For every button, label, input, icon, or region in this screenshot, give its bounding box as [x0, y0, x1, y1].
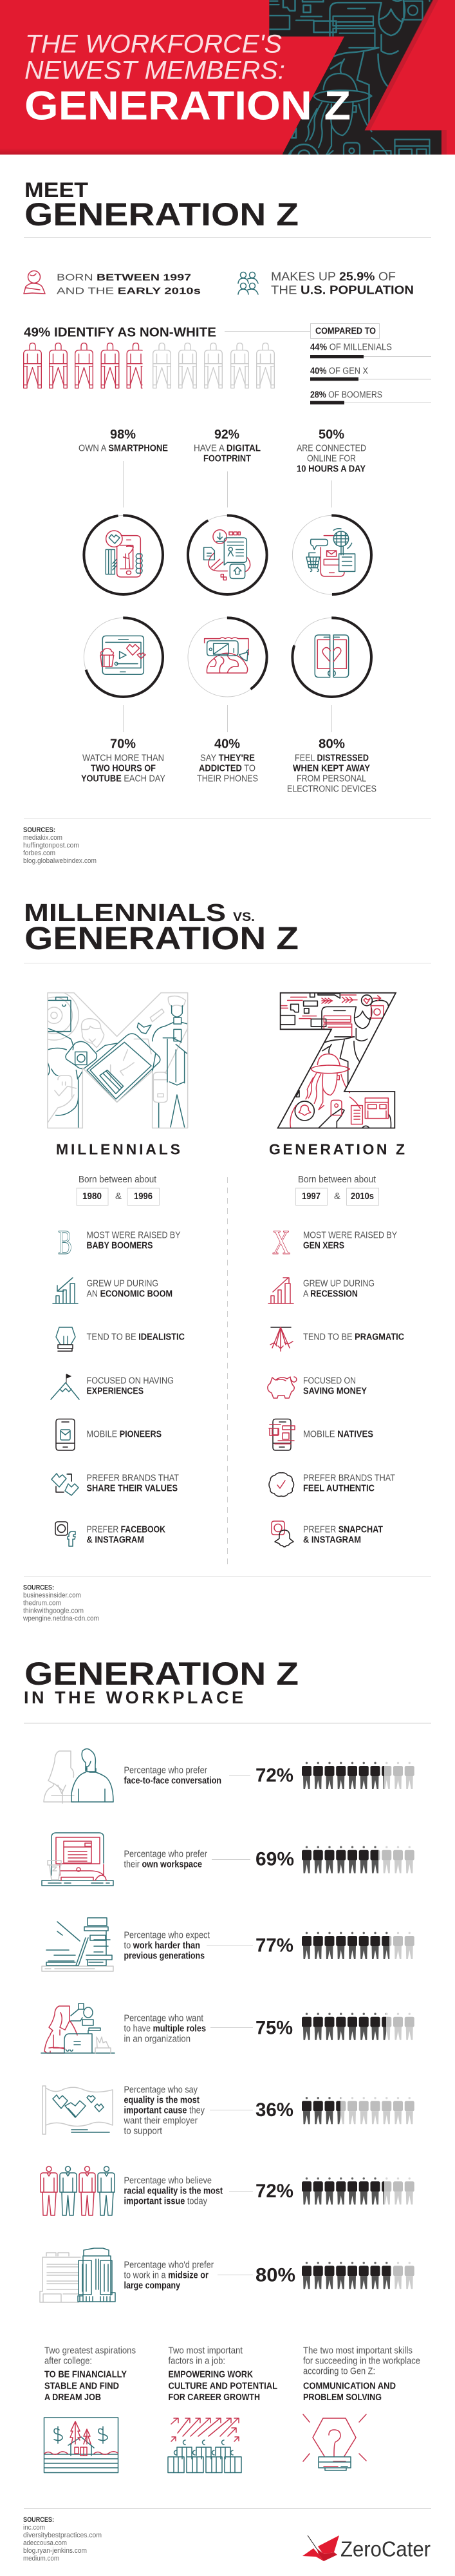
birth years: millennials: [77, 1174, 160, 1206]
banner title: THE WORKFORCE'S: [25, 30, 282, 58]
comparison bars: COMPARED TO: [315, 326, 376, 337]
header banner: [0, 0, 455, 155]
workplace row: own workspace: [42, 1833, 414, 1886]
workplace row: face-to-face: 72%: [255, 1765, 293, 1786]
heading: meet generation z: [24, 178, 299, 232]
sources 3: diversitybestpractices.com: [23, 2532, 102, 2539]
row: social, gen z: PREFER SNAPCHAT: [303, 1524, 383, 1535]
stat: addicted: [188, 618, 267, 784]
banner title: [24, 30, 351, 129]
icon: connected shopping: [306, 529, 355, 576]
column: aspirations: [44, 2345, 136, 2473]
workplace row: face-to-face: [44, 1749, 414, 1803]
sources 1: huffingtonpost.com: [23, 842, 79, 849]
icon: digital footprint: [204, 530, 250, 580]
stat: youtube: TWO HOURS OF: [91, 763, 156, 773]
stat: connected online: 10 HOURS A DAY: [297, 464, 366, 474]
stat: distressed: 80%: [319, 737, 345, 752]
row: social, millennials: [55, 1522, 165, 1546]
row: brands, millennials: SHARE THEIR VALUES: [86, 1484, 178, 1494]
sources 1: mediakix.com: [23, 834, 62, 842]
stat: addicted: 40%: [214, 737, 240, 752]
sources 2: wpengine.netdna-cdn.com: [23, 1615, 99, 1623]
birth years: gen z: &: [334, 1191, 340, 1202]
row: social, gen z: & INSTAGRAM: [303, 1535, 361, 1545]
born between block: AND THE EARLY 2010s: [57, 287, 201, 297]
column: skills: according to Gen Z:: [303, 2365, 375, 2376]
workplace row: work harder: previous generations: [124, 1950, 205, 1961]
column: job factors: factors in a job:: [169, 2355, 225, 2366]
icon: team with arrows: [168, 2418, 241, 2473]
column: job factors: CULTURE AND POTENTIAL: [169, 2381, 277, 2391]
birth years: millennials: 1980: [82, 1191, 102, 1202]
icon: instagram and snapchat: [272, 1521, 284, 1535]
sources 3: medium.com: [23, 2555, 59, 2562]
row: mobile, gen z: MOBILE NATIVES: [303, 1429, 373, 1439]
sources 2: thedrum.com: [23, 1600, 61, 1607]
birth years: millennials: Born between about: [79, 1174, 157, 1185]
icon: letter B: B: [58, 1223, 72, 1262]
row: mobile, millennials: [56, 1419, 162, 1450]
stat: addicted: SAY THEY'RE: [200, 753, 255, 763]
icon: authenticity badge: [269, 1473, 293, 1497]
stat: digital footprint: [188, 428, 267, 594]
workplace row: racial equality: [41, 2166, 414, 2215]
stat: youtube: WATCH MORE THAN: [82, 753, 164, 763]
column: skills: [303, 2345, 420, 2470]
row: mobile, millennials: MOBILE PIONEERS: [86, 1429, 162, 1439]
row: social, millennials: PREFER FACEBOOK: [86, 1524, 165, 1535]
heading: millennials vs generation z: [24, 900, 299, 956]
workplace row: multiple roles: to have multiple roles: [124, 2023, 206, 2034]
stat: digital footprint: 92%: [214, 428, 239, 442]
icon: roots: [271, 1327, 291, 1328]
workplace row: equality cause: important cause they: [124, 2105, 205, 2116]
heading: meet generation z: GENERATION Z: [24, 196, 299, 232]
population block: [238, 270, 414, 297]
workplace row: multiple roles: 75%: [255, 2017, 293, 2038]
row: mindset, millennials: TEND TO BE IDEALISTIC: [86, 1332, 185, 1343]
column: job factors: EMPOWERING WORK: [169, 2370, 253, 2380]
heading: generation z in the workplace: GENERATION Z: [24, 1656, 299, 1692]
stat: distressed: FROM PERSONAL: [297, 773, 366, 784]
row: brands, gen z: [269, 1473, 395, 1497]
icon: phone with heart: [106, 531, 142, 577]
row: social, millennials: & INSTAGRAM: [86, 1535, 144, 1545]
row: focus, millennials: FOCUSED ON HAVING: [86, 1376, 174, 1387]
row: economy, millennials: GREW UP DURING: [86, 1279, 158, 1289]
sources 3: SOURCES:: [23, 2516, 54, 2524]
row: mindset, gen z: [270, 1327, 404, 1351]
stat: smartphone: [79, 428, 168, 594]
heading: generation z in the workplace: IN THE WORKPLACE: [24, 1688, 243, 1707]
birth years: gen z: 2010s: [351, 1191, 374, 1202]
banner title: GENERATION Z: [24, 84, 351, 129]
generation z label: GENERATION Z: [269, 1141, 405, 1158]
row: raised by, gen z: [272, 1223, 397, 1262]
banner dark Z with line art: [269, 0, 441, 155]
comparison bars: [310, 323, 431, 404]
column: skills: COMMUNICATION AND: [303, 2381, 396, 2391]
workplace row: equality cause: to support: [124, 2125, 163, 2136]
workplace row: equality cause: want their employer: [124, 2115, 198, 2126]
row: economy, millennials: AN ECONOMIC BOOM: [86, 1289, 172, 1300]
birth years: gen z: [296, 1174, 378, 1206]
banner title: NEWEST MEMBERS:: [24, 57, 285, 85]
icon: lightbulb: [56, 1327, 75, 1345]
workplace row: work harder: Percentage who expect: [124, 1929, 210, 1940]
column: skills: PROBLEM SOLVING: [303, 2392, 382, 2403]
comparison bars: 28% OF BOOMERS: [310, 389, 382, 400]
workplace row: multiple roles: in an organization: [124, 2033, 190, 2044]
stat: youtube: 70%: [110, 737, 136, 752]
sources 1: [23, 826, 97, 865]
icon: piggy bank: [268, 1377, 297, 1398]
millennials label: MILLENNIALS: [56, 1141, 180, 1158]
circle icons, drawn in 3x coordinates: [100, 529, 355, 677]
workplace row: company size: Percentage who'd prefer: [124, 2260, 214, 2271]
pictogram: ten figures: [24, 343, 274, 388]
column: skills: The two most important skills: [303, 2345, 413, 2356]
population block: MAKES UP 25.9% OF: [271, 270, 396, 283]
heading: meet generation z: MEET: [24, 178, 89, 202]
icon: dream house: [44, 2418, 118, 2473]
stat: smartphone: 98%: [110, 428, 136, 442]
row: brands, millennials: [51, 1473, 179, 1495]
icon: two people talking: [44, 1749, 113, 1803]
stat: addicted: ADDICTED TO: [199, 763, 255, 773]
workplace row: own workspace: 69%: [255, 1849, 294, 1870]
sources 1: SOURCES:: [23, 826, 55, 834]
column: aspirations: STABLE AND FIND: [44, 2381, 119, 2391]
population block: THE U.S. POPULATION: [271, 284, 414, 297]
workplace row: equality cause: 36%: [255, 2099, 293, 2121]
sources 2: businessinsider.com: [23, 1592, 81, 1600]
row: focus, millennials: [51, 1374, 174, 1399]
row: economy, gen z: GREW UP DURING: [303, 1279, 375, 1289]
heading: millennials vs generation z: VS.: [233, 911, 255, 924]
icon: flag with hearts: [42, 2086, 113, 2134]
row: focus, gen z: SAVING MONEY: [303, 1387, 367, 1397]
row: raised by, gen z: MOST WERE RAISED BY: [303, 1230, 397, 1240]
row: raised by, millennials: BABY BOOMERS: [86, 1240, 153, 1251]
workplace row: company size: large company: [124, 2280, 181, 2291]
icon: four people: [41, 2166, 115, 2215]
icon: mountain and flag: [51, 1383, 79, 1399]
illustration: letter M: [47, 992, 188, 1128]
icon: letter X: X: [272, 1223, 290, 1262]
sources 3: blog.ryan-jenkins.com: [23, 2547, 87, 2555]
icon: falling chart: [53, 1278, 78, 1303]
icon: origami crane: [302, 2535, 339, 2561]
workplace row: equality cause: equality is the most: [124, 2094, 200, 2105]
stat: distressed: WHEN KEPT AWAY: [293, 763, 370, 773]
column: aspirations: after college:: [44, 2355, 92, 2366]
icon: lightbulb question: [303, 2414, 366, 2470]
sources 3: [23, 2516, 102, 2562]
stat: distressed: ELECTRONIC DEVICES: [287, 784, 376, 794]
icon: phone with mail: [56, 1419, 75, 1450]
sources 3: inc.com: [23, 2524, 45, 2532]
comparison bars: 40% OF GEN X: [310, 366, 368, 377]
column: aspirations: TO BE FINANCIALLY: [44, 2370, 127, 2380]
workplace row: multiple roles: [41, 2003, 414, 2053]
icon: woman at laptop: [41, 2003, 115, 2053]
row: focus, gen z: [268, 1376, 367, 1398]
workplace row: company size: 80%: [255, 2264, 295, 2286]
workplace row: multiple roles: Percentage who want: [124, 2012, 204, 2023]
logo: zerocater: ZeroCater: [340, 2537, 431, 2561]
workplace row: own workspace: their own workspace: [124, 1859, 202, 1870]
workplace row: racial equality: important issue today: [124, 2196, 207, 2207]
row: focus, gen z: FOCUSED ON: [303, 1376, 356, 1387]
workplace row: equality cause: [42, 2084, 414, 2136]
row: mindset, gen z: TEND TO BE PRAGMATIC: [303, 1332, 404, 1343]
workplace row: face-to-face: face-to-face conversation: [124, 1775, 221, 1786]
heading: millennials vs generation z: GENERATION Z: [24, 920, 299, 956]
illustration: letter Z: [278, 993, 396, 1128]
sources 2: [23, 1584, 99, 1623]
workplace row: company size: to work in a midsize or: [124, 2270, 209, 2281]
stat: distressed: [287, 618, 376, 794]
row: mindset, millennials: [56, 1327, 185, 1351]
sources 1: blog.globalwebindex.com: [23, 857, 97, 865]
row: economy, gen z: [268, 1278, 375, 1303]
column: job factors: Two most important: [169, 2345, 243, 2356]
sources 1: forbes.com: [23, 849, 55, 857]
row: raised by, gen z: GEN XERS: [303, 1240, 344, 1251]
stat: youtube: [81, 618, 165, 784]
logo: zerocater: [302, 2535, 431, 2561]
icon: youtube tablet: [100, 636, 145, 674]
row: focus, millennials: EXPERIENCES: [86, 1387, 144, 1397]
row: social, gen z: [272, 1521, 383, 1547]
workplace row: work harder: 77%: [255, 1935, 293, 1956]
column: aspirations: A DREAM JOB: [44, 2392, 101, 2403]
born between block: [24, 270, 201, 297]
row: raised by, millennials: MOST WERE RAISED BY: [86, 1230, 181, 1240]
icon: rising chart: [268, 1278, 293, 1303]
icon: desktop computer: [42, 1833, 113, 1886]
row: brands, gen z: PREFER BRANDS THAT: [303, 1473, 395, 1484]
birth years: gen z: Born between about: [298, 1174, 376, 1185]
row: mobile, gen z: [269, 1419, 373, 1450]
icon: office buildings: [40, 2248, 115, 2302]
sources 2: SOURCES:: [23, 1584, 54, 1592]
comparison bars: 44% OF MILLENIALS: [310, 342, 392, 353]
icon: hearts: [51, 1473, 79, 1495]
row: brands, millennials: PREFER BRANDS THAT: [86, 1473, 179, 1484]
birth years: gen z: 1997: [302, 1191, 320, 1202]
workplace row: company size: [40, 2248, 414, 2302]
workplace row: work harder: [42, 1918, 414, 1971]
workplace row: own workspace: Percentage who prefer: [124, 1848, 207, 1859]
row: raised by, millennials: [58, 1223, 181, 1262]
stat: connected online: ARE CONNECTED: [297, 443, 366, 453]
column: skills: for succeeding in the workplace: [303, 2355, 420, 2366]
icon: laptop and books: [42, 1918, 113, 1971]
stat: smartphone: OWN A SMARTPHONE: [79, 443, 168, 453]
stat: connected online: 50%: [319, 428, 344, 442]
row: brands, gen z: FEEL AUTHENTIC: [303, 1484, 375, 1494]
column: aspirations: Two greatest aspirations: [44, 2345, 136, 2356]
sources 2: thinkwithgoogle.com: [23, 1607, 84, 1615]
icon: phone with apps: [273, 1419, 291, 1450]
stat: distressed: FEEL DISTRESSED: [295, 753, 369, 763]
column: job factors: FOR CAREER GROWTH: [169, 2392, 260, 2403]
icon: two hearts phones: [315, 635, 349, 677]
icon: baby: [24, 270, 45, 294]
workplace row: racial equality: 72%: [255, 2181, 293, 2202]
non-white stat: [24, 325, 310, 388]
stat: digital footprint: FOOTPRINT: [203, 453, 251, 464]
heading: millennials vs generation z: MILLENNIALS: [24, 900, 226, 927]
birth years: millennials: &: [115, 1191, 122, 1202]
non-white stat: 49% IDENTIFY AS NON-WHITE: [24, 325, 216, 339]
stat: digital footprint: HAVE A DIGITAL: [194, 443, 261, 453]
icon: brain and phone: [205, 638, 248, 673]
stat: connected online: ONLINE FOR: [307, 453, 356, 464]
born between block: BORN BETWEEN 1997: [57, 273, 191, 283]
stat: addicted: THEIR PHONES: [197, 773, 258, 784]
workplace row: equality cause: Percentage who say: [124, 2084, 198, 2095]
heading: generation z in the workplace: [24, 1656, 299, 1707]
workplace row: face-to-face: Percentage who prefer: [124, 1765, 207, 1776]
icon: instagram and facebook: [55, 1522, 68, 1535]
row: economy, millennials: [53, 1278, 172, 1303]
birth years: millennials: 1996: [134, 1191, 153, 1202]
row: economy, gen z: A RECESSION: [303, 1289, 358, 1300]
column: job factors: [168, 2345, 277, 2473]
icon: four people: [238, 272, 258, 294]
sources 3: adeccousa.com: [23, 2539, 67, 2547]
stat: youtube: YOUTUBE EACH DAY: [81, 773, 165, 784]
workplace row: racial equality: Percentage who believe: [124, 2175, 212, 2186]
workplace row: racial equality: racial equality is the most: [124, 2186, 223, 2197]
workplace row: work harder: to work harder than: [124, 1940, 200, 1951]
stat: connected online: [292, 428, 371, 594]
